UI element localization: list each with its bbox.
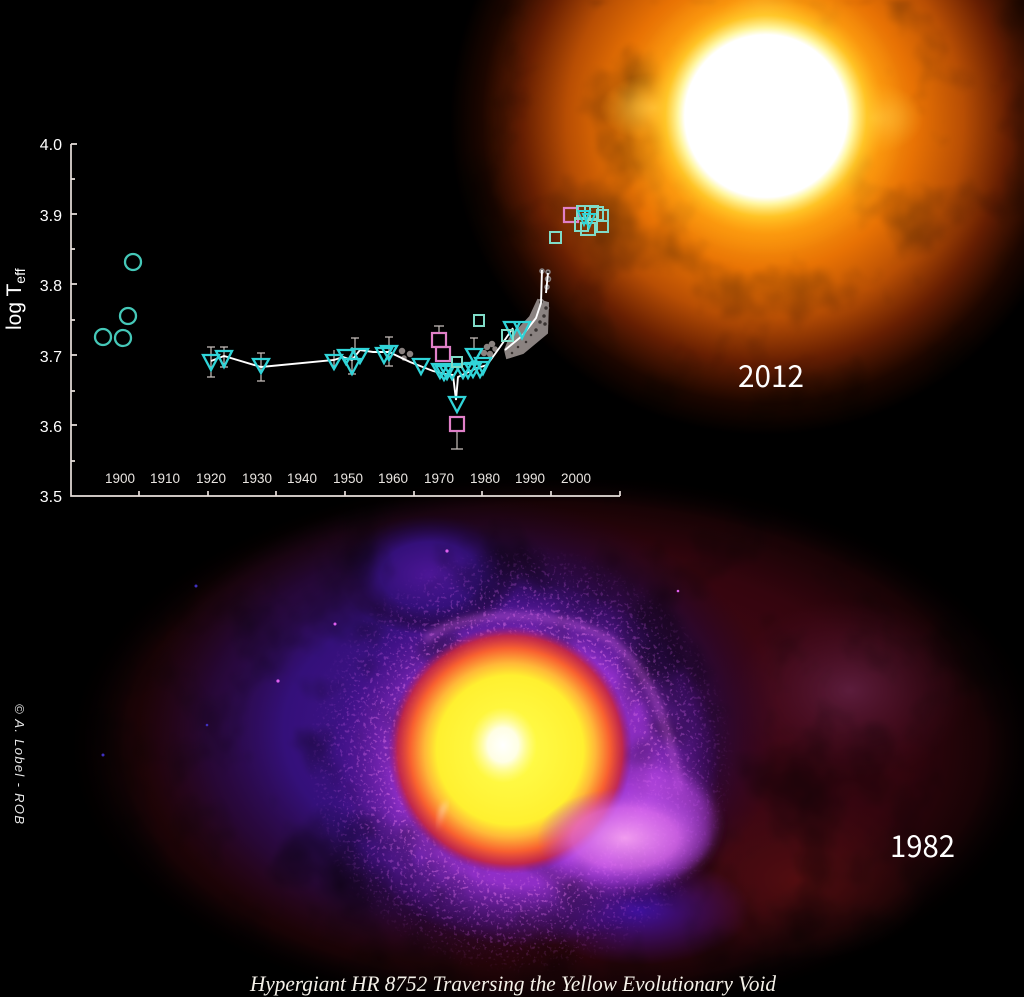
title: Hypergiant HR 8752 Traversing the Yellow Evolutionary Void (249, 971, 777, 996)
circle markers (95, 254, 141, 346)
axes (71, 144, 620, 496)
y axis tick labels: 4.0 (40, 137, 62, 154)
y axis label: log T (3, 284, 26, 330)
white fit line (211, 270, 548, 400)
y axis tick labels: 3.6 (40, 419, 62, 436)
y axis tick labels: 3.9 (40, 208, 62, 225)
x axis year labels: 1990 (515, 471, 545, 486)
y axis tick labels (40, 137, 62, 506)
x axis year labels: 1970 (424, 471, 454, 486)
error bars (207, 326, 478, 449)
x axis year labels: 1910 (150, 471, 180, 486)
y axis tick labels: 3.7 (40, 349, 62, 366)
credit: © A. Lobel - ROB (12, 704, 27, 824)
y axis tick labels: 3.8 (40, 278, 62, 295)
image: star in 2012 (440, 0, 1024, 440)
y axis tick labels: 3.5 (40, 489, 62, 506)
label: 2012: 2012 (738, 352, 804, 396)
x axis year labels: 1980 (470, 471, 500, 486)
x axis year labels: 1940 (287, 471, 317, 486)
x axis year labels: 2000 (561, 471, 591, 486)
image: star in 1982 (0, 470, 1024, 997)
y axis label: eff (12, 268, 28, 284)
stars (276, 549, 679, 683)
x axis year labels (105, 471, 591, 486)
x axis year labels: 1920 (196, 471, 226, 486)
square markers (432, 208, 578, 431)
x axis year labels: 1900 (105, 471, 135, 486)
x axis year labels: 1950 (333, 471, 363, 486)
label: 1982: 1982 (890, 822, 955, 866)
chart: log Teff vs year (3, 137, 620, 506)
x axis year labels: 1930 (242, 471, 272, 486)
triangle markers (203, 322, 530, 412)
grey dense points (400, 269, 550, 360)
x axis year labels: 1960 (378, 471, 408, 486)
